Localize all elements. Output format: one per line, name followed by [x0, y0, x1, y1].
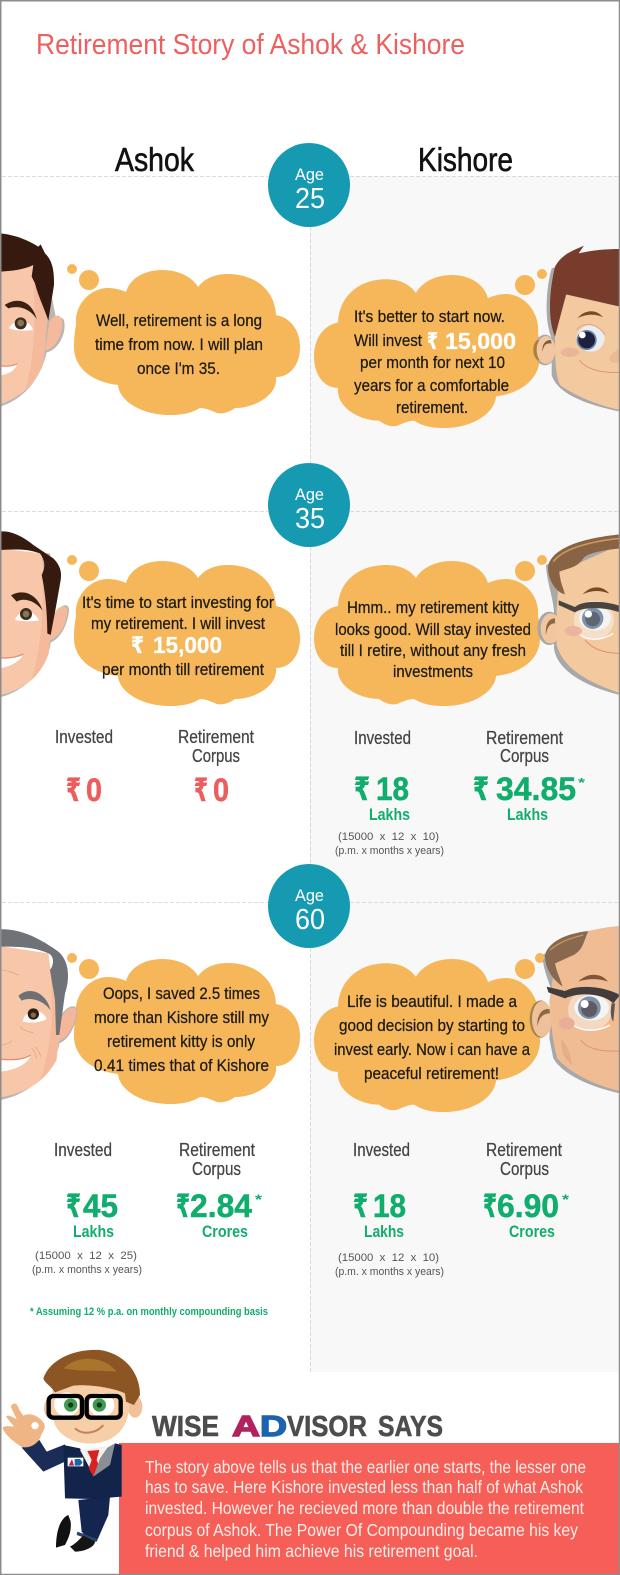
stats: Kishore age 60: 6.90 — [497, 1188, 559, 1224]
thought bubble: Kishore age 60 — [314, 953, 545, 1112]
character: Ashok age 35 — [0, 531, 69, 697]
thought bubble: Ashok age 35: per month till retirement — [102, 660, 264, 679]
thought bubble: Kishore age 25: 15,000 — [445, 328, 516, 354]
stats: Kishore age 60: 18 — [373, 1188, 406, 1224]
heading: Wise Advisor Says — [152, 1411, 443, 1443]
stats: Ashok age 60: ₹ — [176, 1188, 190, 1224]
stats: Kishore age 60: * — [562, 1191, 570, 1207]
thought bubble: Kishore age 35 — [314, 555, 547, 706]
thought bubble: Ashok age 25: once I'm 35. — [137, 359, 220, 378]
thought bubble: Ashok age 35: 15,000 — [153, 632, 222, 658]
thought bubble: Ashok age 60: retirement kitty is only — [107, 1032, 255, 1051]
heading: Wise Advisor Says: D — [260, 1411, 287, 1443]
thought bubble: Kishore age 60: Life is beautiful. I made a — [347, 992, 517, 1011]
stats: Ashok age 35: ₹ — [194, 772, 208, 808]
stats: Ashok age 60: Corpus — [192, 1159, 241, 1179]
stats: Kishore age 60: Lakhs — [364, 1222, 404, 1241]
stats: Ashok age 60: ₹ — [66, 1188, 81, 1224]
stats: Kishore age 35: Retirement — [486, 728, 563, 748]
stats: Kishore age 60: Retirement — [486, 1140, 562, 1160]
thought bubble: Kishore age 25: years for a comfortable — [354, 376, 509, 395]
stats: Kishore age 35: Corpus — [500, 746, 549, 766]
stats: Ashok age 60: (p.m. x months x years) — [32, 1264, 142, 1276]
character: Ashok age 25 — [0, 233, 65, 407]
thought bubble: Kishore age 25 — [314, 269, 547, 428]
stats: Kishore age 60: Corpus — [500, 1159, 549, 1179]
stats: Ashok age 35: Corpus — [192, 746, 240, 766]
heading: Wise Advisor Says: WISE — [152, 1411, 219, 1443]
stats: Ashok age 60: 2.84 — [190, 1188, 252, 1224]
thought bubble: Kishore age 25: Will invest — [354, 331, 422, 350]
thought bubble: Ashok age 25 — [67, 264, 300, 415]
title: Retirement Story of Ashok & Kishore — [36, 29, 465, 61]
thought bubble: Kishore age 35: till I retire, without any fresh — [340, 641, 526, 660]
character: Kishore age 60 — [530, 926, 620, 1093]
stats: Ashok age 60: (15000 x 12 x 25) — [35, 1250, 137, 1262]
stats: Kishore age 35: 18 — [376, 771, 409, 807]
thought bubble: Ashok age 35: It's time to start investing for — [82, 593, 274, 612]
thought bubble: Kishore age 35: investments — [393, 662, 473, 681]
age badge: 25: 25 — [295, 183, 325, 215]
stats: Ashok age 60: Lakhs — [73, 1222, 114, 1241]
stats: Ashok age 35 — [55, 727, 254, 808]
stats: Kishore age 35: 34.85 — [496, 771, 576, 807]
thought bubble: Ashok age 60 — [67, 953, 300, 1104]
character: Kishore age 25 — [533, 246, 620, 412]
stats: Kishore age 60: Invested — [353, 1140, 410, 1160]
panel: advisor message: corpus of Ashok. The Power Of Compounding became his key — [145, 1520, 578, 1540]
thought bubble: Ashok age 25: Well, retirement is a long — [96, 311, 262, 330]
stats: Kishore age 60 — [335, 1140, 570, 1278]
panel: advisor message — [119, 1443, 619, 1574]
thought bubble: Ashok age 60: Oops, I saved 2.5 times — [103, 984, 260, 1003]
thought bubble: Kishore age 25: per month for next 10 — [360, 353, 505, 372]
age badge: 35: 35 — [295, 503, 325, 535]
stats: Ashok age 60: * — [255, 1191, 263, 1207]
thought bubble: Kishore age 60: invest early. Now i can have a — [334, 1040, 530, 1059]
stats: Kishore age 35: Lakhs — [507, 805, 548, 824]
footnote: * Assuming 12 % p.a. on monthly compounding basis — [30, 1306, 268, 1318]
age badge: 60 — [268, 864, 350, 948]
heading: Wise Advisor Says: SAYS — [378, 1411, 443, 1443]
panel: Kishore column background — [310, 176, 620, 1372]
thought bubble: Ashok age 60: more than Kishore still my — [94, 1008, 269, 1027]
stats: Ashok age 35: Invested — [55, 727, 113, 747]
thought bubble: Ashok age 35 — [67, 555, 300, 706]
thought bubble: Kishore age 25: retirement. — [396, 398, 468, 417]
age badge: 60: 60 — [295, 904, 325, 936]
stats: Kishore age 60: (p.m. x months x years) — [335, 1266, 444, 1278]
character: wise advisor — [3, 1350, 142, 1552]
stats: Kishore age 60: (15000 x 12 x 10) — [338, 1252, 439, 1264]
age badge: 35 — [268, 463, 350, 547]
stats: Ashok age 60: Retirement — [179, 1140, 255, 1160]
stats: Ashok age 35: ₹ — [66, 772, 81, 808]
thought bubble: Kishore age 25: ₹ — [427, 328, 438, 354]
thought bubble: Kishore age 25: It's better to start now. — [354, 307, 505, 326]
heading: Wise Advisor Says: VISOR — [287, 1411, 367, 1443]
character: Kishore age 35 — [537, 534, 620, 695]
stats: Ashok age 60: Invested — [54, 1140, 112, 1160]
stats: Kishore age 60: ₹ — [353, 1188, 368, 1224]
heading: Wise Advisor Says: A — [232, 1411, 260, 1443]
thought bubble: Kishore age 60: peaceful retirement! — [364, 1064, 499, 1083]
stats: Kishore age 35: * — [578, 775, 586, 790]
stats: Kishore age 35 — [335, 728, 586, 857]
age badge: 60: Age — [295, 886, 324, 905]
panel: advisor message: friend & helped him achieve his retirement goal. — [145, 1541, 478, 1561]
thought bubble: Kishore age 60: good decision by starting to — [339, 1016, 525, 1035]
thought bubble: Ashok age 35: my retirement. I will invest — [91, 614, 265, 633]
age badge: 25 — [268, 143, 350, 227]
stats: Kishore age 60: ₹ — [483, 1188, 497, 1224]
thought bubble: Ashok age 35: ₹ — [131, 632, 144, 658]
stats: Kishore age 60: Crores — [509, 1222, 555, 1241]
heading: Kishore: Kishore — [418, 141, 513, 178]
stats: Ashok age 35: Retirement — [178, 727, 254, 747]
stats: Kishore age 35: Invested — [354, 728, 411, 748]
thought bubble: Kishore age 35: looks good. Will stay invested — [335, 620, 531, 639]
stats: Ashok age 60: Crores — [202, 1222, 248, 1241]
thought bubble: Ashok age 60: 0.41 times that of Kishore — [94, 1056, 269, 1075]
stats: Kishore age 35: ₹ — [354, 771, 370, 807]
age badge: 35: Age — [295, 485, 324, 504]
thought bubble: Kishore age 35: Hmm.. my retirement kitty — [347, 598, 519, 617]
stats: Ashok age 35: 0 — [213, 772, 229, 808]
stats: Ashok age 60 — [32, 1140, 263, 1276]
stats: Ashok age 35: 0 — [86, 772, 102, 808]
stats: Ashok age 60: 45 — [83, 1188, 118, 1224]
stats: Kishore age 35: (15000 x 12 x 10) — [338, 831, 439, 843]
stats: Kishore age 35: (p.m. x months x years) — [335, 845, 444, 857]
thought bubble: Ashok age 25: time from now. I will plan — [95, 335, 263, 354]
heading: Ashok: Ashok — [115, 141, 194, 178]
stats: Kishore age 35: Lakhs — [369, 805, 410, 824]
age badge: 25: Age — [295, 165, 324, 184]
character: Ashok age 60 — [0, 929, 77, 1100]
stats: Kishore age 35: ₹ — [473, 771, 489, 807]
